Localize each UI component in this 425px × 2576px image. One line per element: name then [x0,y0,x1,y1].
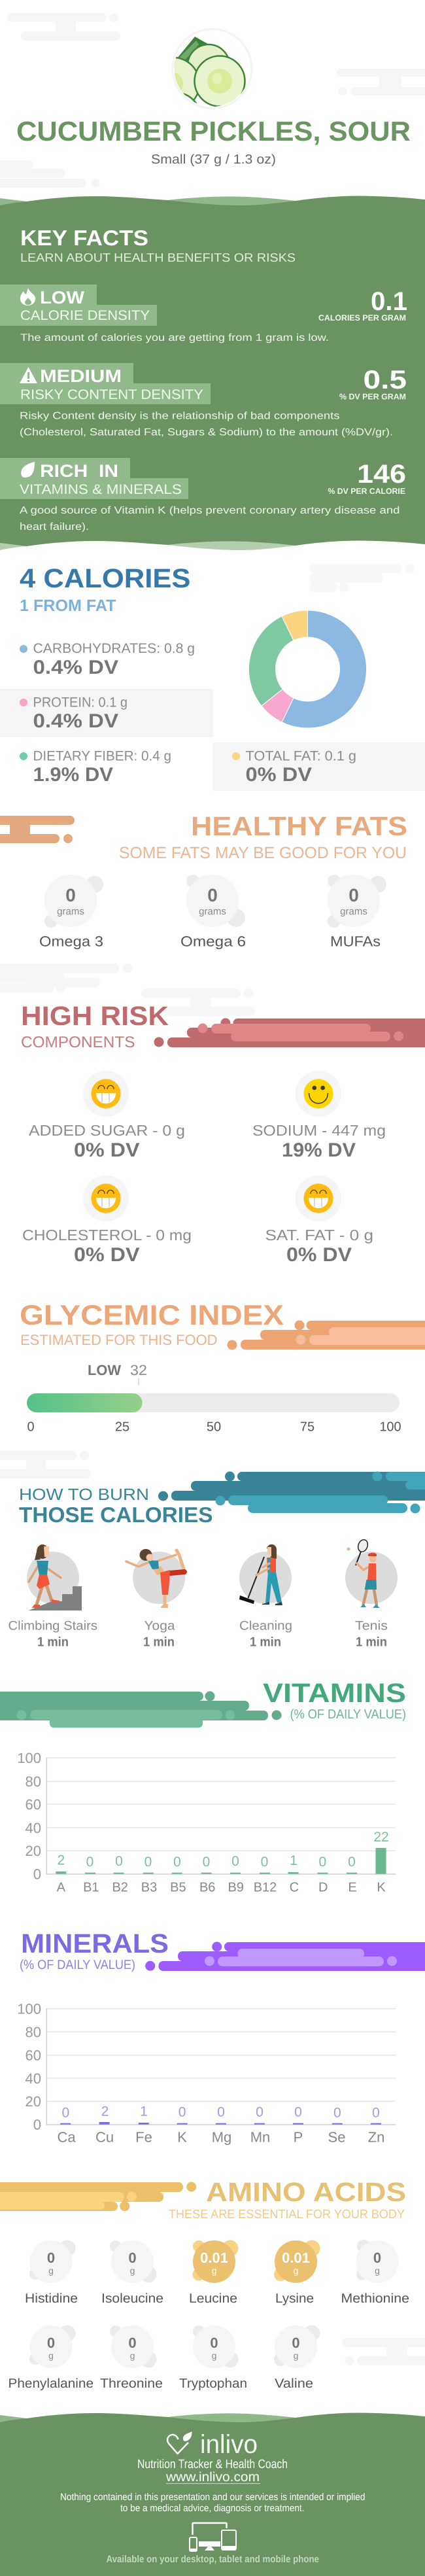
description [20,411,393,438]
decoration: healthy fats bars [0,816,75,843]
bar chart: minerals: 0 [256,2105,264,2119]
bar chart: vitamins: 40 [26,1820,41,1836]
bar chart: vitamins: 0 [203,1854,210,1870]
legend: dietary fiber: 1.9% DV [33,764,113,786]
amino: valine: g [294,2350,298,2361]
bar chart: minerals: 0 [61,2106,69,2121]
amino: valine: 0 [292,2335,300,2351]
icon: grin [303,1184,333,1213]
amino: histidine: Histidine [25,2291,78,2306]
bar chart: vitamins: 0 [173,1854,181,1870]
item: saturated fat: 0% DV [286,1244,352,1266]
amino: lysine: Lysine [275,2291,314,2306]
bar chart: vitamins: B2 [112,1881,128,1895]
item: omega 3: grams [57,906,84,917]
gauge scale [27,1420,401,1435]
legend: protein: PROTEIN: 0.1 g [33,695,128,710]
gauge scale: 0 [27,1420,35,1435]
amino: lysine: g [294,2265,298,2276]
heading: glycemic index: GLYCEMIC INDEX [20,1300,284,1331]
bar chart: vitamins: B3 [141,1881,157,1895]
amino: threonine: Threonine [100,2376,163,2391]
bar chart: vitamins: C [290,1881,299,1895]
amino: valine [274,2325,320,2391]
bar chart: minerals: K [177,2129,187,2145]
panel: minerals [17,1928,425,2145]
bar chart: vitamins [17,1750,396,1895]
item: omega 6: grams [199,906,226,917]
description: (Cholesterol, Saturated Fat, Sugars & Sodium) to the amount (%DV/gr). [20,427,393,438]
bar chart: minerals: 0 [333,2106,341,2121]
bar chart: minerals: 0 [294,2105,302,2119]
disclaimer: Nothing contained in this presentation and our services is intended or implied [60,2492,365,2503]
gauge scale: 100 [379,1420,401,1435]
unit: % DV PER GRAM [339,392,406,402]
activity: climbing stairs: Climbing Stairs [8,1619,97,1633]
bar chart: minerals: Ca [58,2129,76,2145]
item: added sugar: 0% DV [74,1140,140,1161]
activity: climbing stairs [8,1544,97,1650]
bar chart: minerals: Mn [250,2129,270,2145]
legend: total fat: 0% DV [246,764,312,786]
gauge scale: 75 [300,1420,314,1435]
amino: threonine [100,2325,163,2391]
amino: methionine: Methionine [341,2291,409,2306]
bar chart: vitamins: 1 [290,1853,298,1868]
value: 0.1: 0.1 [371,287,407,316]
amino: phenylalanine [8,2325,94,2391]
panel: key facts [0,196,425,563]
bar chart: vitamins: 0 [348,1854,356,1870]
heading: amino acids: AMINO ACIDS [206,2177,406,2207]
availability note: Available on your desktop, tablet and mobile phone [106,2554,319,2565]
bar chart: vitamins: 0 [144,1854,152,1870]
bar chart: vitamins: B12 [254,1881,277,1895]
bar chart: minerals: 2 [101,2104,109,2119]
amino: threonine: g [130,2350,135,2361]
label: medium: MEDIUM [40,366,122,386]
activity: cleaning: Cleaning [239,1619,292,1633]
description: A good source of Vitamin K (helps prevent coronary artery disease and [20,505,400,516]
amino: leucine: g [212,2265,216,2276]
bar chart: vitamins: B5 [170,1881,186,1895]
decoration: vitamins bars [0,1692,281,1728]
description [20,505,400,532]
amino: tryptophan: Tryptophan [179,2376,247,2391]
subheading: THESE ARE ESSENTIAL FOR YOUR BODY [169,2208,405,2221]
bar chart: minerals: Cu [95,2129,114,2145]
icon: devices [190,2523,236,2551]
bar chart: vitamins: A [57,1881,66,1895]
bar chart: minerals: 0 [178,2105,186,2119]
panel: amino acids [0,2177,409,2391]
bar chart: vitamins: 0 [319,1854,326,1870]
bar chart: minerals: Se [328,2129,345,2145]
gauge bar [27,1393,400,1412]
panel: calories [0,563,425,791]
amino: methionine: 0 [373,2250,381,2266]
item: mufas: 0 [348,885,359,905]
item: omega 6: 0 [207,885,218,905]
amino: isoleucine: 0 [128,2250,137,2266]
bar chart: minerals: 1 [140,2104,148,2119]
label: calorie density: CALORIE DENSITY [20,308,150,323]
title: CUCUMBER PICKLES, SOUR [16,116,411,147]
decoration: amino bars [0,2182,196,2211]
bar chart: vitamins: 0 [261,1854,268,1870]
bar chart: vitamins: 100 [17,1750,41,1766]
panel: how to burn those calories [8,1472,425,1650]
panel: glycemic index [20,1300,425,1435]
activity: yoga: 1 min [143,1635,175,1650]
subheading: from fat: 1 FROM FAT [20,597,116,615]
item: sodium: 19% DV [282,1140,356,1161]
decoration: glycemic bars [228,1320,425,1350]
bar chart: vitamins: E [348,1881,357,1895]
activity: yoga: Yoga [144,1619,175,1633]
legend: total fat [213,742,425,791]
background cloud: amino [343,2338,425,2365]
subheading: LEARN ABOUT HEALTH BENEFITS OR RISKS [20,251,296,264]
amino: histidine: 0 [47,2250,55,2266]
bar chart: minerals: 0 [33,2117,41,2132]
amino: leucine [189,2240,238,2306]
fact: low calorie density [0,285,407,343]
heading: key facts: KEY FACTS [20,226,148,250]
heading: how to burn: HOW TO BURN [19,1486,149,1504]
description: heart failure). [20,521,89,532]
background cloud: burn [0,1451,91,1478]
bar chart: minerals: Zn [368,2129,384,2145]
bar chart: minerals: 20 [26,2093,41,2110]
label: rich in: RICH IN [40,461,118,481]
item: cholesterol: 0% DV [74,1244,140,1266]
item: saturated fat [265,1175,373,1266]
legend: carbohydrates: CARBOHYDRATES: 0.8 g [33,641,195,656]
heading: healthy fats: HEALTHY FATS [191,811,407,841]
amino: valine: Valine [275,2376,313,2391]
item: mufas: grams [340,906,367,917]
bar chart: vitamins: 0 [33,1866,41,1883]
amino: leucine: 0.01 [200,2250,228,2266]
item: omega 3: 0 [65,885,76,905]
item: omega 3 [39,875,103,950]
amino: lysine: 0.01 [282,2250,310,2266]
bar chart: minerals: 0 [217,2105,225,2119]
activity: cleaning [239,1544,292,1650]
heading: those calories: THOSE CALORIES [19,1503,213,1527]
background cloud: calories [309,564,415,592]
logo: inlivo [167,2430,258,2459]
item: added sugar [29,1071,185,1161]
amino: phenylalanine: 0 [47,2335,55,2351]
unit: % DV PER CALORIE [328,487,405,496]
decoration: high risk bars [154,1018,425,1047]
bar chart: minerals [17,2000,396,2145]
subheading: (% OF DAILY VALUE) [20,1958,135,1972]
legend: dietary fiber [20,749,171,786]
legend: carbohydrates [20,641,195,678]
icon: leaf [21,462,35,478]
amino: phenylalanine: Phenylalanine [8,2376,94,2391]
bar chart: vitamins: B1 [83,1881,99,1895]
legend: total fat: TOTAL FAT: 0.1 g [246,749,356,764]
amino: isoleucine: g [130,2265,135,2276]
logo: inlivo: inlivo [200,2430,258,2459]
bar chart: vitamins: B6 [199,1881,215,1895]
background clouds: header [0,13,425,188]
item: mufas: MUFAs [330,933,381,950]
activity: tennis: Tenis [355,1619,388,1633]
panel: vitamins [0,1678,406,1895]
subheading: (% OF DAILY VALUE) [290,1707,406,1722]
decoration: minerals bars [145,1941,425,1971]
unit: CALORIES PER GRAM [318,313,406,322]
bar chart: vitamins: D [318,1881,328,1895]
bar chart: vitamins: 60 [26,1796,41,1813]
heading: high risk: HIGH RISK [21,1001,169,1031]
amino: isoleucine: Isoleucine [101,2291,163,2306]
bar chart: vitamins: B9 [228,1881,244,1895]
amino: leucine: Leucine [189,2291,237,2306]
item: omega 6: Omega 6 [180,933,246,950]
activity: cleaning: 1 min [250,1635,281,1650]
amino: tryptophan [179,2325,247,2391]
icon: flame [20,288,35,305]
amino: lysine [274,2240,320,2306]
icon: warning triangle [20,367,37,383]
label: risky content density: RISKY CONTENT DENSITY [20,387,203,402]
bar chart: minerals: 0 [372,2106,380,2121]
legend: carbohydrates: 0.4% DV [33,657,118,678]
amino: tryptophan: g [212,2350,216,2361]
bar chart: vitamins: K [377,1881,386,1895]
disclaimer [60,2492,365,2514]
bar chart: minerals: 40 [26,2070,41,2087]
item: mufas [328,875,386,950]
value: 146: 146 [357,460,406,489]
bar chart: vitamins: 22 [373,1830,389,1845]
disclaimer: to be a medical advice, diagnosis or treatment. [120,2503,305,2514]
decoration: burn bars [158,1472,425,1514]
website: www.inlivo.com [165,2470,260,2484]
background clouds: high risk [0,964,255,1016]
item: cholesterol [22,1175,192,1266]
bar chart: vitamins: 0 [115,1854,123,1869]
label: vitamins and minerals: VITAMINS & MINERALS [20,482,182,497]
gauge scale: 50 [207,1420,221,1435]
description: Risky Content density is the relationship of bad components [20,411,340,421]
amino: isoleucine [101,2240,163,2306]
item: cholesterol: CHOLESTEROL - 0 mg [22,1227,192,1244]
activity: tennis: 1 min [356,1635,387,1650]
subheading: components: COMPONENTS [21,1034,135,1051]
label: low: LOW [40,288,85,307]
amino: tryptophan: 0 [210,2335,218,2351]
heading: vitamins: VITAMINS [263,1678,406,1708]
value: 0.5: 0.5 [364,366,407,394]
legend: protein [0,689,213,737]
bar chart: minerals: 80 [26,2024,41,2040]
footer [0,2412,425,2576]
food image: cucumber slices [171,28,252,109]
amino: phenylalanine: g [48,2350,54,2361]
heading: calories: 4 CALORIES [20,563,191,593]
legend: protein: 0.4% DV [33,710,118,732]
amino: threonine: 0 [128,2335,137,2351]
fact: medium risky content density [0,363,407,438]
subheading: SOME FATS MAY BE GOOD FOR YOU [119,844,407,862]
item: sodium [252,1071,386,1161]
activity: tennis [345,1539,398,1650]
icon: grin [92,1079,120,1108]
panel: high risk [21,1001,425,1266]
amino: methionine [341,2240,409,2306]
bar chart: vitamins: 0 [86,1854,94,1870]
bar chart: vitamins: 0 [231,1854,239,1869]
amino: histidine: g [48,2265,54,2276]
donut chart [248,610,367,728]
bar chart: minerals: P [294,2129,303,2145]
amino: methionine: g [375,2265,380,2276]
bar chart: minerals: 100 [17,2000,41,2017]
gauge scale: 25 [115,1420,129,1435]
amino: histidine [25,2240,78,2306]
fact: rich in vitamins and minerals [0,458,406,532]
icon: grin [92,1184,120,1213]
icon: smile [303,1079,333,1108]
item: saturated fat: SAT. FAT - 0 g [265,1227,373,1244]
item: added sugar: ADDED SUGAR - 0 g [29,1122,185,1139]
bar chart: minerals: 60 [26,2047,41,2063]
gauge value: 32: 32 [130,1362,147,1378]
bar chart: vitamins: 80 [26,1773,41,1790]
bar chart: minerals: Mg [212,2129,231,2145]
activity: yoga [126,1549,185,1650]
item: omega 6 [180,875,246,950]
panel: healthy fats [0,811,407,950]
gauge label: low: LOW [88,1362,121,1378]
bar chart: vitamins: 2 [57,1853,65,1868]
description: The amount of calories you are getting from 1 gram is low. [20,332,329,343]
activity: climbing stairs: 1 min [37,1635,69,1650]
bar chart: minerals: Fe [135,2129,152,2145]
bar chart: vitamins: 20 [26,1843,41,1859]
item: sodium: SODIUM - 447 mg [252,1122,386,1139]
item: omega 3: Omega 3 [39,933,103,950]
serving size: Small (37 g / 1.3 oz) [151,152,276,167]
heading: minerals: MINERALS [21,1928,169,1958]
subheading: ESTIMATED FOR THIS FOOD [20,1332,217,1348]
tagline: Nutrition Tracker & Health Coach [137,2458,288,2471]
legend: dietary fiber: DIETARY FIBER: 0.4 g [33,749,171,764]
